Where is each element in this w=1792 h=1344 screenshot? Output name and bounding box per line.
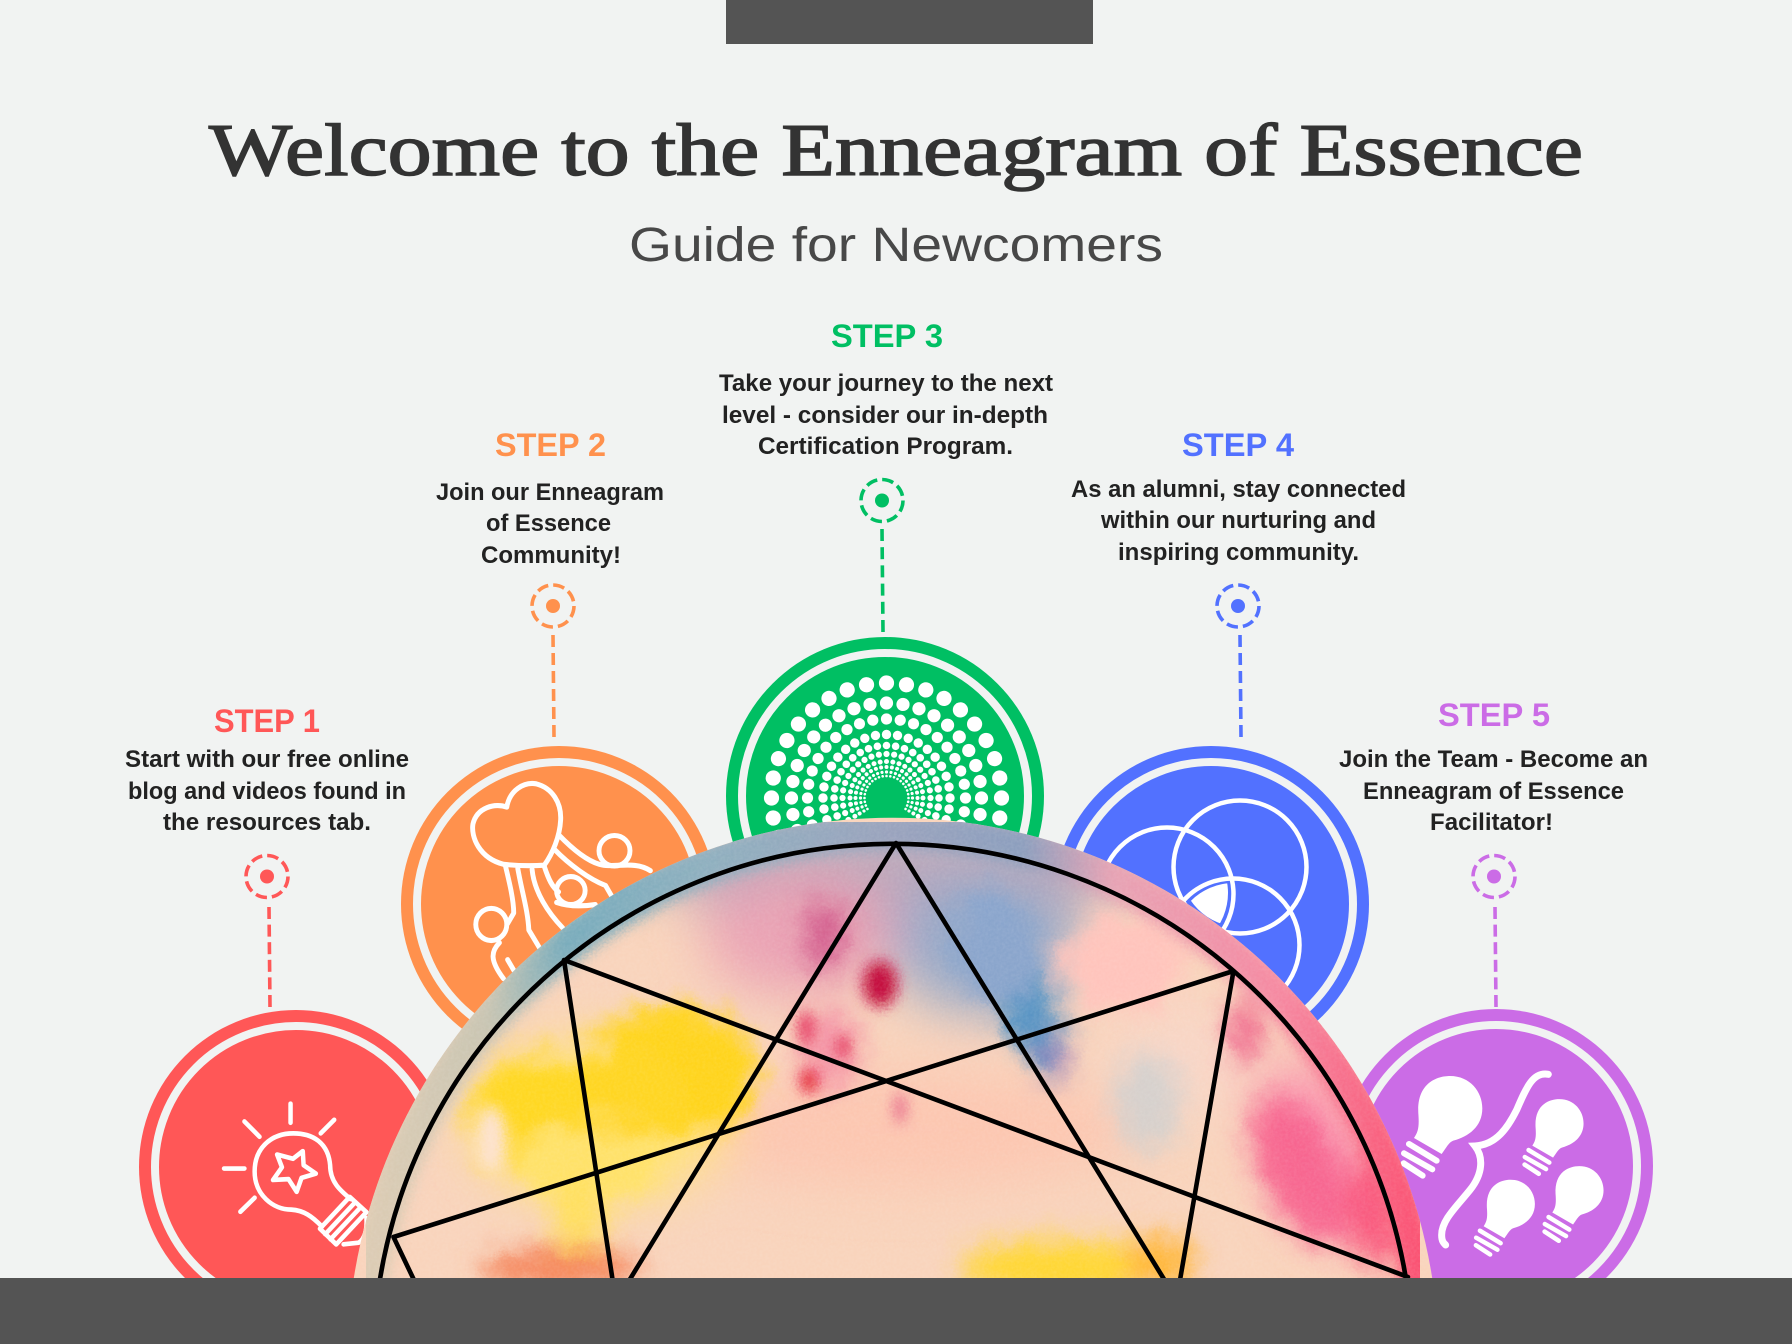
step 2 marker <box>532 585 574 627</box>
step 3 connector <box>882 529 883 632</box>
step 3 description: Certification Program. <box>758 433 1013 460</box>
step 1 <box>125 703 453 1324</box>
step 4 connector <box>1240 635 1241 737</box>
step 3 description: Take your journey to the next <box>719 370 1053 397</box>
step 2 description: of Essence <box>486 510 611 537</box>
step 3 <box>719 318 1053 955</box>
icon: radial dot pattern <box>764 675 1009 866</box>
step 3 circle <box>726 637 1044 955</box>
watercolor enneagram semicircle <box>340 810 1450 1300</box>
step 1 description <box>125 746 409 836</box>
step 3 description: level - consider our in-depth <box>722 402 1048 429</box>
step 2 circle <box>401 746 717 1062</box>
step 5 <box>1339 697 1653 1323</box>
step 2 connector <box>553 635 554 737</box>
step 4 description: within our nurturing and <box>1100 507 1376 534</box>
step 2 description <box>436 479 664 569</box>
step 5 description <box>1339 746 1648 836</box>
subtitle: Guide for Newcomers <box>629 219 1163 272</box>
step 2 heading: STEP 2 <box>495 427 606 463</box>
step 3 heading: STEP 3 <box>831 318 943 354</box>
icon: light bulb with star <box>224 1104 367 1244</box>
step 2 <box>401 427 717 1062</box>
step 4 description: As an alumni, stay connected <box>1071 476 1406 503</box>
enneagram symbol <box>380 843 1408 1280</box>
step 1 description: Start with our free online <box>125 746 409 773</box>
step 5 circle <box>1339 1009 1653 1323</box>
step 1 heading: STEP 1 <box>214 703 320 739</box>
step 1 circle <box>139 1010 453 1324</box>
top bar <box>726 0 1093 44</box>
icon: four light bulbs and squiggle <box>1404 1074 1604 1254</box>
step 1 marker <box>246 856 288 898</box>
title: Welcome to the Enneagram of Essence <box>209 110 1583 192</box>
step 1 description: blog and videos found in <box>128 778 406 805</box>
step 1 description: the resources tab. <box>163 809 371 836</box>
icon: overlapping venn circles <box>1106 798 1309 986</box>
step 2 description: Join our Enneagram <box>436 479 664 506</box>
step 4 circle <box>1053 746 1369 1062</box>
icon: heart held by connected people <box>473 783 650 979</box>
step 5 marker <box>1473 856 1515 898</box>
step 3 marker <box>861 480 903 522</box>
step 4 description: inspiring community. <box>1118 539 1359 566</box>
bottom bar <box>0 1278 1792 1344</box>
step 4 marker <box>1217 585 1259 627</box>
step 5 description: Join the Team - Become an <box>1339 746 1648 773</box>
step 4 description <box>1071 476 1406 566</box>
step 4 <box>1064 433 1404 1020</box>
step 5 description: Enneagram of Essence <box>1363 778 1624 805</box>
step 5 connector <box>1495 907 1496 1007</box>
watercolor background <box>340 810 1450 1300</box>
step 3 description <box>719 370 1053 460</box>
step 5 description: Facilitator! <box>1430 809 1553 836</box>
step 2 description: Community! <box>481 542 621 569</box>
step 1 connector <box>269 907 270 1007</box>
step 4 heading: STEP 4 <box>1182 427 1294 463</box>
step 5 heading: STEP 5 <box>1438 697 1550 733</box>
